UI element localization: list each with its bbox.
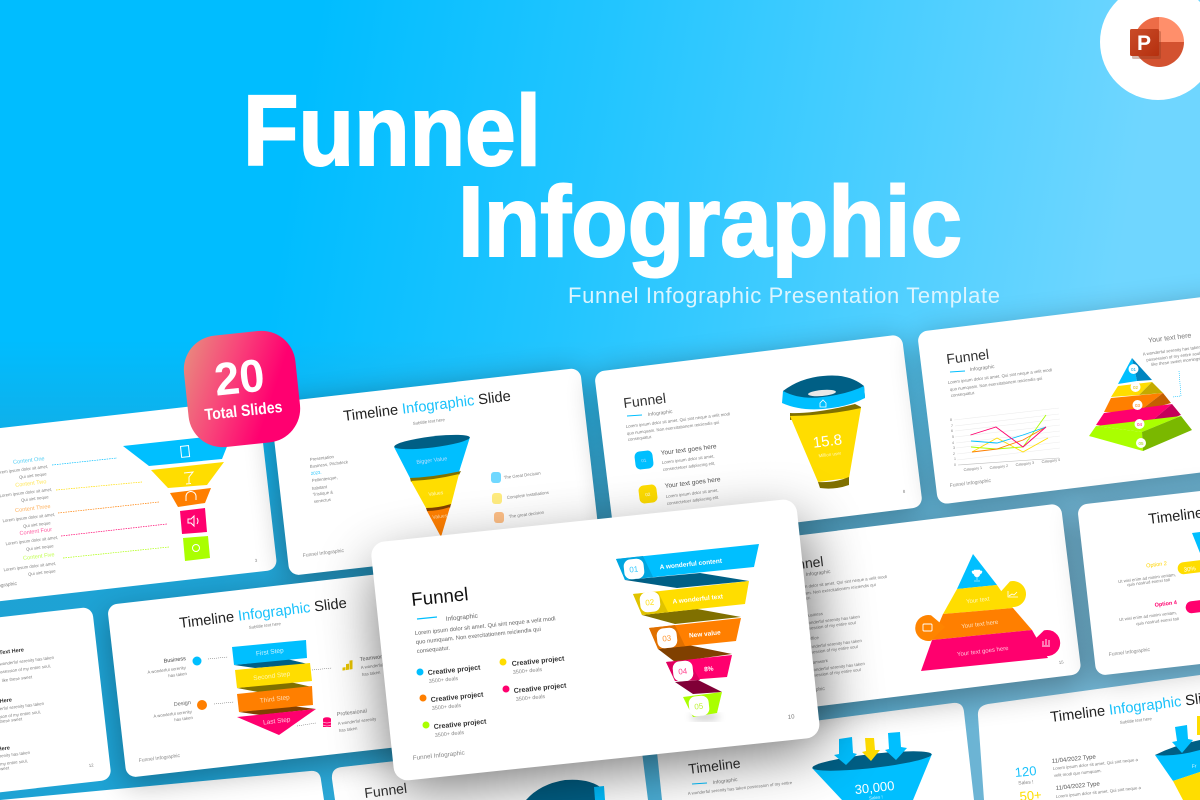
option 4: Ut wisi enim ad minim veniam, (1119, 610, 1177, 622)
subtitle and rows: Teamwork (808, 658, 829, 665)
paragraph: quo numquam. Non exercitationem reiciendis qui (950, 376, 1043, 392)
funnel side (594, 786, 605, 800)
pyramid: Your text (966, 597, 990, 605)
paragraph: quo numquam. Non exercitationem reiciendis qui (627, 420, 720, 436)
slide title: Funnel (410, 583, 469, 610)
pyramid callout (1142, 332, 1200, 397)
icon: PowerPoint logo: P (1137, 32, 1151, 55)
design item: A wonderful serenity (153, 709, 193, 719)
card (657, 703, 974, 800)
card (0, 399, 277, 605)
list item orange: 3500+ deals (432, 703, 462, 712)
shadow of chart card (917, 300, 1200, 511)
slide subtitle: Subtitle text here (413, 417, 446, 426)
item 01: Your text goes here (660, 443, 717, 457)
professional item: has taken (339, 726, 358, 733)
slide title: Timeline Infographic Slide (343, 389, 512, 425)
ribbon 04: 04 (678, 667, 688, 676)
funnel edge (1192, 532, 1200, 553)
paragraph: consequatur. (417, 646, 451, 655)
slide: timeline stats (978, 675, 1200, 800)
small slide cards (0, 294, 1200, 800)
ribbon 02: 02 (645, 598, 655, 607)
badge: 20 total slides (180, 327, 304, 451)
paragraph: Lorem ipsum dolor sit amet. Qui sint neque a velit modi (415, 616, 556, 637)
3D pyramid: 04 (1137, 422, 1142, 427)
stats: 120 (1014, 763, 1037, 780)
design item: has taken (174, 715, 194, 722)
line chart: 7 (951, 424, 953, 428)
item 01 (634, 443, 717, 472)
pyramid (921, 554, 1048, 671)
professional item (297, 708, 377, 733)
content labels: Lorem ipsum dolor sit amet, (2, 512, 55, 523)
list item blue: 3500+ deals (429, 676, 459, 685)
dashed connectors (52, 458, 169, 558)
slide subtitle: Infographic (970, 364, 995, 373)
left text list: Business, Pitchdeck (310, 459, 349, 469)
line chart: 2 (953, 452, 955, 456)
left text list: habitant (312, 484, 328, 491)
slide subtitle: Infographic (445, 613, 479, 623)
item 02: Lorem ipsum dolor sit amet, (666, 488, 719, 499)
shadow of 3D funnel card (594, 340, 923, 551)
main slide: funnel card (370, 498, 821, 782)
slide footer: Funnel Infographic (139, 753, 181, 764)
line chart: Category 1 (963, 466, 982, 472)
option 4 (1119, 597, 1200, 626)
slide: four-step stacked funnel (107, 570, 437, 778)
page number: 10 (788, 714, 796, 721)
item 02: 02 (645, 492, 651, 497)
title: Funnel: Funnel (243, 75, 541, 187)
paragraph (626, 411, 730, 442)
list item pink: Creative project (513, 682, 567, 695)
item 01: 01 (641, 458, 647, 463)
card (1077, 470, 1200, 676)
business item: Business (163, 656, 186, 665)
teamwork item (312, 654, 400, 677)
content labels: Content One (13, 456, 45, 466)
line chart (950, 408, 1060, 472)
slide: body text column (0, 607, 112, 800)
text rows (0, 647, 94, 774)
paragraph (415, 616, 556, 655)
content labels: Content Four (19, 527, 53, 537)
ribbon 02: A wonderful text (672, 593, 724, 606)
card (0, 607, 112, 800)
title: Infographic: Infographic (458, 166, 962, 278)
line chart: 1 (954, 457, 956, 461)
ribbon 03 (649, 618, 741, 662)
content labels: Content Five (23, 552, 55, 562)
item 02 (638, 476, 721, 506)
subtitle and rows: Funnel Infographic (783, 686, 826, 697)
card (594, 334, 923, 545)
ribbon 05: 05 (694, 702, 704, 711)
line chart: Category 4 (1041, 458, 1060, 464)
subtitle and rows: A wonderful serenity has taken (801, 614, 861, 626)
content labels: Qui sint neque (19, 471, 47, 480)
slide footer: Funnel Infographic (950, 478, 992, 489)
badge number: 20 (212, 349, 267, 406)
line chart: 0 (954, 463, 956, 467)
pyramid callout: A wonderful serenity has taken (1142, 344, 1200, 357)
content labels: Qui sint neque (28, 568, 56, 577)
subtitle and rows: A wonderful serenity has taken (806, 661, 866, 673)
list item yellow (500, 655, 565, 676)
slide subtitle: Infographic (648, 409, 673, 418)
ribbon 03: New value (689, 629, 721, 640)
slide: bottom funnel card (332, 735, 648, 800)
3D pyramid: 01 (1131, 367, 1136, 372)
slide: line chart and stacked pyramid (917, 294, 1200, 505)
slide subtitle: Subtitle text here (1120, 716, 1153, 725)
ribbon 05 (683, 692, 722, 717)
pyramid callout: like these sweet mornings (1151, 356, 1200, 367)
content labels: Qui sint neque (21, 494, 49, 503)
list item orange: Creative project (430, 691, 484, 704)
left text list: Tristique & (313, 490, 333, 497)
right checklist: Complete Installations (507, 490, 549, 500)
left text list: Pellentesque, (312, 475, 338, 483)
accent line (627, 415, 642, 416)
content labels: Qui sint neque (23, 520, 51, 529)
subtitle and rows: possession of my entire soul (807, 667, 861, 679)
option 4: quis nostrud exerci tati (1136, 616, 1179, 626)
timeline entries: Lorem ipsum dolor sit amet. Qui sint neque a (1053, 757, 1139, 771)
list item pink: 3500+ deals (516, 694, 546, 703)
step stack: Last Step (263, 716, 291, 727)
step stack: First Step (256, 647, 284, 658)
card (753, 503, 1082, 712)
page number: 15 (1059, 659, 1064, 665)
cone funnel: Bigger Value (416, 456, 448, 466)
3D pyramid: 05 (1138, 441, 1144, 446)
design item: Design (174, 700, 191, 708)
card (917, 294, 1200, 505)
funnel with arrow: Fr (1192, 763, 1197, 770)
text rows: like these sweet (2, 674, 33, 683)
option 2: Ut wisi enim ad minim veniam, (1118, 572, 1176, 584)
3D pyramid: 03 (1135, 403, 1140, 408)
list item blue (416, 664, 481, 685)
slide title: Funnel (780, 553, 824, 574)
left text list: 2023. (311, 470, 322, 476)
paragraph: A wonderful serenity has taken possession of my entire (688, 780, 793, 796)
slide: timeline funnel with arrows (657, 703, 974, 800)
option 2 (1118, 558, 1200, 587)
slide title: Timeline (687, 755, 742, 777)
item 02: consectetuer adipiscing elit. (667, 495, 720, 506)
content labels: 3 (255, 558, 258, 563)
card (370, 498, 821, 782)
slide footer: Funnel Infographic (412, 750, 465, 762)
card (978, 675, 1200, 800)
funnel stack (123, 434, 232, 561)
left text list (310, 454, 349, 504)
subtitle and rows: Office (807, 635, 820, 641)
pyramid: Your text here (961, 620, 999, 630)
ribbon 04: 8% (704, 666, 714, 673)
ribbon funnel (616, 544, 759, 720)
subtitle and rows: A wonderful serenity has taken (803, 638, 863, 650)
yellow teardrop (996, 581, 1026, 607)
line chart: Category 3 (1015, 461, 1034, 467)
slide: pyramid with teardrops (753, 503, 1082, 712)
slide subtitle: Subtitle text here (249, 621, 282, 630)
funnel top (526, 780, 604, 800)
card (332, 735, 648, 800)
stats (1014, 763, 1042, 800)
left text list: senectus (314, 497, 331, 504)
timeline entries: Lorem ipsum dolor sit amet. Qui sint neque a (1056, 785, 1142, 799)
accent line (950, 371, 965, 372)
right checklist (491, 470, 549, 523)
funnel icons (180, 446, 200, 552)
line chart: 4 (952, 441, 954, 445)
line chart: 8 (950, 418, 952, 422)
3D pyramid: 02 (1133, 385, 1138, 390)
content labels (0, 456, 258, 592)
timeline entries: 11/04/2022 Type (1056, 781, 1101, 792)
paragraph: Lorem ipsum dolor sit amet. Qui sint neque a velit modi (626, 411, 730, 429)
subtitle and rows: Business (805, 611, 823, 618)
paragraph: Lorem ipsum dolor sit amet. Qui sint neque a velit modi (948, 367, 1052, 385)
list item yellow: 3500+ deals (513, 667, 543, 676)
list item green: Creative project (433, 718, 487, 731)
subtitle and rows: Lorem ipsum dolor sit amet. Qui sint neque a velit modi (782, 574, 887, 592)
PowerPoint badge (1100, 0, 1200, 100)
3D pyramid (1089, 358, 1192, 451)
funnel with arrow (1155, 716, 1200, 800)
list item yellow: Creative project (511, 655, 565, 668)
teamwork item: A wonderful serenity (361, 660, 400, 670)
ribbon 04 (666, 655, 732, 694)
ribbon 01: 01 (629, 565, 639, 574)
text rows: 12 (89, 762, 94, 768)
ribbon 01: A wonderful content (659, 558, 723, 571)
ribbon 03: 03 (662, 634, 672, 643)
teamwork item: Teamwork (360, 654, 385, 663)
slide footer: Funnel Infographic (303, 548, 345, 559)
item 02: Your text goes here (664, 476, 721, 490)
step stack: Second Step (253, 671, 291, 682)
slide title: Funnel (622, 390, 667, 411)
teamwork item: has taken (362, 670, 381, 677)
right checklist: The Great Decision (504, 470, 541, 480)
funnel ground shadow (690, 714, 720, 720)
shadow of timeline cone card (270, 374, 600, 582)
slide footer: Funnel Infographic (1109, 647, 1151, 658)
business item (147, 656, 228, 678)
list item pink (502, 682, 567, 703)
paragraph: consequatur. (951, 390, 976, 398)
timeline entries (1052, 754, 1142, 799)
content labels: Qui sint neque (26, 543, 54, 552)
line chart: 6 (951, 429, 953, 433)
slide title: Timeline Infographic Slide (179, 596, 348, 632)
slide title: Funnel (945, 346, 990, 367)
middle row shadow (107, 513, 1086, 786)
subtitle: Funnel Infographic Presentation Template (568, 283, 1000, 308)
slide: options timeline (1077, 470, 1200, 676)
slide: funnel with five content rows (0, 399, 277, 605)
right checklist: The great decision (509, 510, 545, 519)
business item: has taken (168, 671, 188, 678)
pink teardrop (1030, 630, 1060, 656)
slide: 3D funnel with 15.8 stat (594, 334, 923, 545)
subtitle and rows (782, 569, 887, 697)
option 4: Option 4 (1154, 600, 1178, 609)
slide: timeline cone funnel (270, 368, 600, 576)
list item green (422, 718, 487, 739)
list item blue: Creative project (427, 664, 481, 677)
step stack: Third Step (260, 694, 291, 705)
line chart: 3 (953, 446, 955, 450)
subtitle and rows: possession of my entire soul (802, 620, 856, 632)
badge shape (180, 327, 304, 451)
design item (153, 700, 234, 722)
card (270, 368, 600, 576)
line chart: 5 (952, 435, 954, 439)
business item: A wonderful serenity (147, 665, 187, 675)
pyramid: Your text goes here (957, 646, 1010, 658)
content labels: Lorem ipsum dolor sit amet, (3, 561, 56, 572)
accent line (417, 617, 437, 619)
left text list: Presentation (310, 454, 335, 462)
slide subtitle: Infographic (713, 777, 738, 786)
subtitle and rows: Infographic (806, 569, 831, 578)
badge label: Total Slides (204, 399, 283, 424)
subtitle and rows: quo numquam. Non exercitationem reiciendis qui (783, 582, 876, 598)
list item green: 3500+ deals (435, 730, 465, 739)
content labels: Content Two (15, 479, 47, 489)
professional item: A wonderful serenity (338, 716, 377, 726)
paragraph: quo numquam. Non exercitationem reiciendis qui (416, 627, 541, 646)
content labels: Lorem ipsum dolor sit amet, (5, 535, 58, 546)
ribbon 01 (616, 544, 759, 588)
orange teardrop (915, 615, 945, 641)
item 01: consectetuer adipiscing elit, (663, 461, 716, 472)
white circle (1100, 0, 1200, 100)
3D funnel: Million user (818, 451, 842, 458)
paragraph (948, 367, 1052, 398)
card (107, 570, 437, 778)
option 2: quis nostrud exerci tati (1127, 577, 1170, 587)
cone funnel: Values (432, 513, 448, 521)
option 2: 30% (1184, 566, 1197, 574)
center card shadow (376, 523, 825, 789)
3D funnel (782, 375, 865, 489)
professional item: Professional (337, 708, 367, 718)
timeline entries: 11/04/2022 Type (1052, 754, 1097, 765)
step stack (232, 640, 316, 735)
subtitle and rows: possession of my entire soul (804, 644, 858, 656)
3D funnel: 15.8 (812, 431, 843, 452)
pyramid callout: Your text here (1148, 332, 1192, 345)
subtitle and rows: consequatur. (786, 595, 811, 603)
content labels: Content Three (15, 504, 51, 514)
accent line (692, 783, 707, 784)
pyramid callout: possession of my entire soul, (1146, 351, 1200, 362)
page number: 8 (903, 489, 906, 494)
option 2: Option 2 (1146, 561, 1167, 570)
slide: bottom left card (0, 771, 324, 800)
item 01: Lorem ipsum dolor sit amet, (662, 454, 715, 465)
stats: Sales ! (1018, 779, 1034, 787)
ribbon 02 (633, 581, 749, 624)
cone funnel (394, 432, 470, 537)
timeline entries: velit modi quo numquam. (1054, 768, 1102, 778)
shadow of options card (1077, 476, 1200, 682)
funnel with arrows (812, 732, 932, 800)
paragraph: consequatur. (628, 434, 653, 442)
list item orange (420, 691, 484, 712)
cone funnel: Values (428, 490, 444, 498)
content labels: Lorem ipsum dolor sit amet, (0, 487, 52, 498)
line chart: Category 2 (989, 464, 1008, 470)
funnel with arrows: 30,000 (854, 778, 895, 797)
